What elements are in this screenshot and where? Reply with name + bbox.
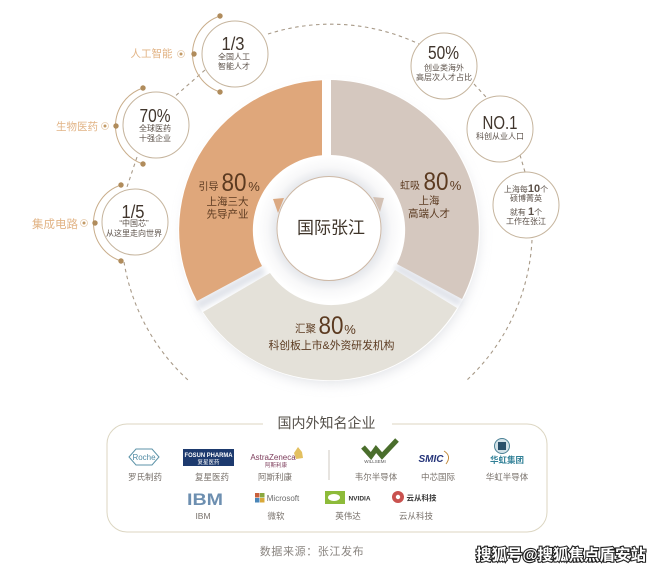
- logo: Fosun Pharma: 复星医药: [197, 458, 220, 466]
- stat circle: AI: 1/3: [222, 34, 244, 54]
- donut chart: [178, 79, 480, 384]
- segment: orange: [179, 80, 322, 301]
- logo: Will Semi: 韦尔半导体: [355, 472, 398, 482]
- logo: Will Semi: WILLSEMI: [364, 459, 386, 464]
- corner tips behind hub: [273, 198, 284, 213]
- segment text: taupe: 上海: [418, 194, 440, 207]
- logo: IBM: IBM: [187, 490, 223, 509]
- logo: Microsoft: [255, 493, 300, 521]
- hub circle: [277, 176, 381, 280]
- logo: Fosun Pharma: FOSUN PHARMA: [184, 452, 233, 459]
- segment text: light grey: [269, 312, 395, 352]
- segment text: orange: 引导: [198, 181, 218, 193]
- logo: NVIDIA: 英伟达: [335, 511, 361, 521]
- logo: NVIDIA: [325, 491, 371, 521]
- stat circle: 1 in 10: 上海每10个: [504, 183, 548, 195]
- panel heading: 国内外知名企业: [278, 415, 376, 431]
- logo: SMIC: 中芯国际: [421, 472, 455, 482]
- stat circle: chips: 1/5: [122, 202, 144, 222]
- logo: Fosun Pharma: [183, 449, 234, 482]
- segment text: orange: 上海三大: [206, 195, 249, 208]
- dashed orbit connecting the stat circles: [124, 24, 532, 380]
- stat circle: No.1: [467, 96, 533, 162]
- logo: AstraZeneca: AstraZeneca: [250, 453, 296, 462]
- logo: IBM: [187, 490, 223, 521]
- logo: AstraZeneca: 阿斯利康: [265, 461, 287, 469]
- stat circle: No.1: NO.1: [482, 113, 518, 133]
- stat circle: chips: [92, 182, 168, 264]
- segment text: taupe: 虹吸: [400, 180, 420, 192]
- stat circle: pharma: 全球医药: [139, 123, 171, 133]
- logo: Microsoft: Microsoft: [267, 494, 300, 503]
- logo: Will Semi: [355, 440, 398, 482]
- logo: SMIC: [418, 451, 455, 482]
- divider: [328, 450, 330, 480]
- stat circle: 1 in 10: 硕博菁英: [510, 193, 542, 203]
- panel: companies: [107, 415, 547, 532]
- logo: SMIC: SMIC: [418, 454, 444, 465]
- stat circle: chips: “中国芯”: [119, 218, 149, 228]
- watermark: 搜狐号@搜狐焦点盾安站: [476, 545, 646, 564]
- segment text: taupe: [400, 168, 462, 220]
- stat circle: AI: 智能人才: [218, 61, 250, 71]
- segment text: light grey: 80: [318, 312, 344, 340]
- segment text: light grey: 汇聚: [295, 322, 316, 335]
- stat circle: AI: [191, 13, 268, 95]
- logo: NVIDIA: NVIDIA: [348, 496, 371, 502]
- segment: taupe: [331, 80, 479, 299]
- segment text: orange: 80: [222, 169, 246, 197]
- logo: Huahong: 华虹半导体: [486, 472, 529, 482]
- side label: chips: 集成电路: [32, 217, 78, 231]
- logo: Huahong: 华虹集团: [490, 455, 524, 465]
- stat circle: overseas talent: [411, 33, 477, 99]
- segment text: orange: [198, 169, 260, 220]
- stat circle: overseas talent: 50%: [428, 43, 459, 63]
- logo: CloudWalk: [392, 491, 437, 521]
- stat circle: 1 in 10: 工作在张江: [506, 216, 546, 226]
- stat circle: chips: 从这里走向世界: [106, 228, 162, 238]
- stat circle: overseas talent: 创业类海外: [424, 62, 464, 72]
- segment text: light grey: %: [344, 322, 356, 337]
- stat circle: pharma: [113, 85, 189, 167]
- stat circle: 1 in 10: 就有 1个: [510, 206, 542, 218]
- segment text: orange: 先导产业: [206, 208, 248, 220]
- logo: CloudWalk: 云从科技: [399, 511, 433, 521]
- stat circle: pharma: 十强企业: [139, 133, 171, 143]
- logo: Microsoft: 微软: [267, 511, 285, 521]
- logo: Huahong: [486, 438, 529, 482]
- segment text: orange: %: [248, 179, 260, 194]
- segment text: taupe: 高端人才: [408, 207, 450, 220]
- data source note: 数据来源：张江发布: [260, 544, 364, 558]
- logo: AstraZeneca: 阿斯利康: [258, 472, 292, 482]
- segment text: taupe: %: [450, 178, 462, 193]
- stat circle: overseas talent: 高层次人才占比: [416, 72, 472, 82]
- logo: Roche: Roche: [132, 453, 156, 462]
- stat circle: AI: 全国人工: [218, 52, 250, 62]
- segment: light grey: [203, 270, 457, 380]
- stat circle: No.1: 科创从业人口: [476, 131, 524, 141]
- logo: IBM: IBM: [195, 511, 211, 521]
- logo: Roche: [128, 449, 162, 482]
- stat circle: 1 in 10: [493, 172, 559, 238]
- segment text: taupe: 80: [424, 168, 448, 196]
- side label: pharma: 生物医药: [56, 120, 98, 133]
- segment text: light grey: 科创板上市&外资研发机构: [269, 338, 395, 352]
- logo: Roche: 罗氏制药: [128, 472, 162, 482]
- stat circle: pharma: 70%: [140, 106, 170, 126]
- hub ring: [256, 156, 402, 302]
- logo: AstraZeneca: [250, 447, 303, 482]
- hub label: 国际张江: [297, 218, 365, 238]
- side label: AI: 人工智能: [130, 47, 173, 60]
- logo: Fosun Pharma: 复星医药: [195, 472, 229, 482]
- logo: CloudWalk: 云从科技: [406, 492, 437, 502]
